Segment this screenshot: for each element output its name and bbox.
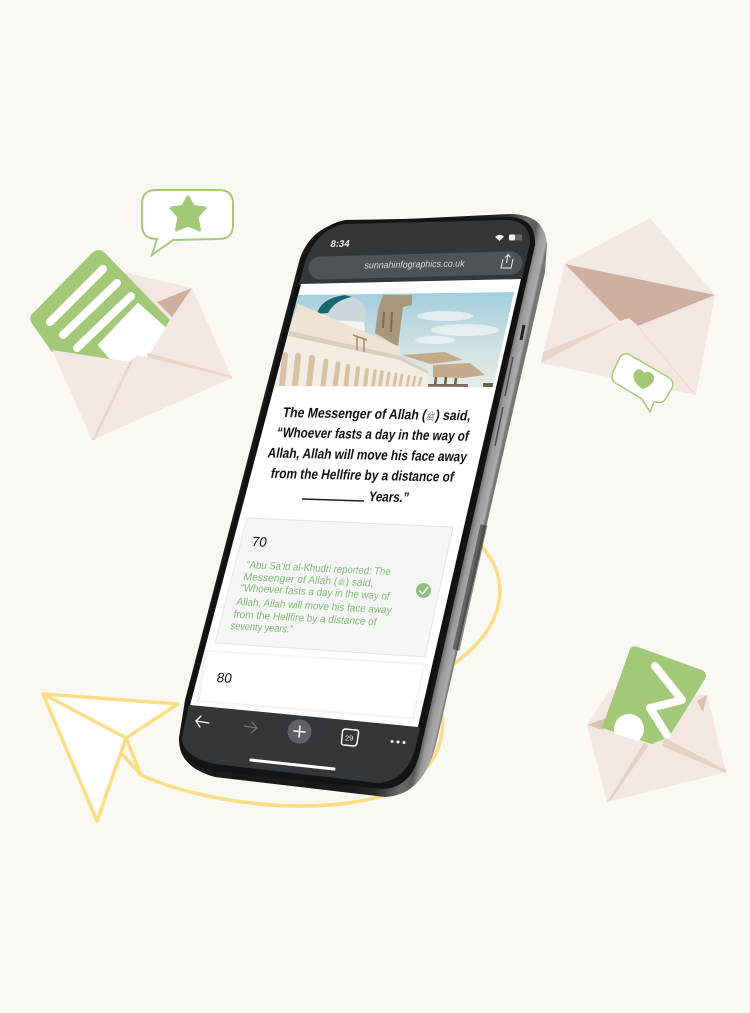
icon: new tab <box>288 720 312 744</box>
illustration <box>30 189 726 823</box>
quiz question <box>266 404 473 505</box>
answer blank <box>302 499 364 501</box>
address bar: sunnahinfographics.co.uk <box>363 259 466 271</box>
photo: mosque <box>270 290 520 390</box>
icon: share <box>501 254 513 268</box>
answer card: 80 <box>196 650 426 720</box>
paper plane <box>43 694 178 821</box>
web page <box>190 279 522 727</box>
icon: speech bubble with heart <box>612 354 673 412</box>
green note <box>602 646 706 744</box>
quiz question: The Messenger of Allah (ﷺ) said, <box>281 404 473 423</box>
quiz question: Years.” <box>367 488 411 505</box>
envelope with green letter, left <box>30 250 232 440</box>
explanation text: Allah, Allah will move his face away <box>235 596 393 617</box>
green letter <box>30 250 170 362</box>
phone <box>179 214 547 797</box>
icon: forward arrow <box>244 722 257 733</box>
explanation text: “Whoever fasts a day in the way of <box>239 582 391 603</box>
icon: back arrow <box>196 716 209 727</box>
address bar <box>320 254 513 271</box>
icon: check mark <box>416 583 431 598</box>
answer card: 70: 70 <box>250 534 269 550</box>
quiz question: from the Hellfire by a distance of <box>269 465 456 485</box>
status icons <box>495 234 522 241</box>
quiz question: Allah, Allah will move his face away <box>266 445 469 464</box>
yellow flight path <box>122 545 500 806</box>
icon: more dots <box>390 740 406 744</box>
icon: tab count <box>341 729 359 746</box>
answer card: 70 <box>215 518 453 657</box>
side buttons <box>495 325 524 446</box>
explanation text: Messenger of Allah (ﷺ) said, <box>242 571 375 589</box>
icon: speech bubble with star <box>142 190 233 255</box>
status bar time: 8:34 <box>329 239 351 250</box>
home indicator <box>251 760 334 769</box>
browser toolbar icons <box>196 716 406 746</box>
envelope with brown inside, right <box>541 218 715 395</box>
answer card: 80: 80 <box>215 670 234 686</box>
explanation text: “Abu Sa’id al-Khudri reported: The <box>245 559 392 578</box>
quiz question: “Whoever fasts a day in the way of <box>275 424 471 444</box>
explanation text <box>229 559 393 636</box>
explanation text: seventy years.” <box>229 620 294 636</box>
phone screen <box>182 220 530 783</box>
explanation text: from the Hellfire by a distance of <box>232 609 378 628</box>
phone frame <box>179 214 547 797</box>
icon: tab count: 29 <box>345 734 353 742</box>
envelope with green note, bottom right <box>587 646 726 802</box>
